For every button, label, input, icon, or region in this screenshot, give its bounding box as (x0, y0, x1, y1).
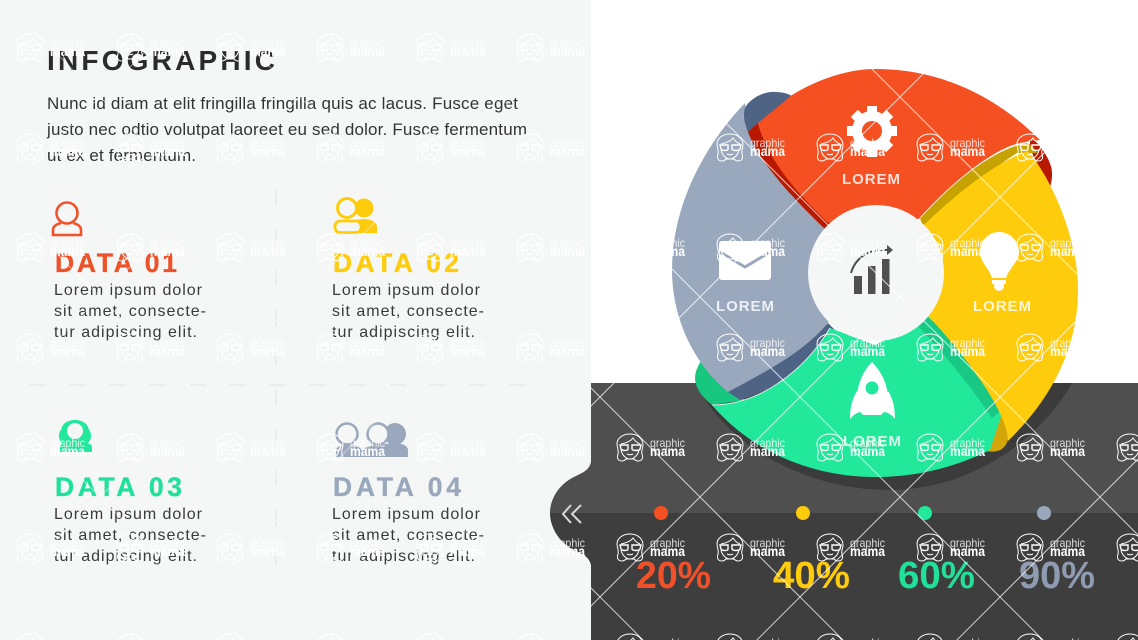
heading: data 03: DATA 03 (55, 472, 182, 502)
text: data 02 body: Lorem ipsum dolor (332, 282, 481, 299)
text: data 03 body: tur adipiscing elit. (54, 548, 197, 565)
icon: group of people (336, 423, 408, 457)
heading: data 04: DATA 04 (333, 472, 461, 502)
icon: double chevron (563, 505, 581, 523)
yellow edge highlight (920, 143, 1025, 218)
legend item: 60% (898, 506, 975, 597)
intro paragraph: justo nec odtio volutpat laoreet eu sed dolor. Fusce fermentum (46, 120, 527, 139)
intro paragraph (46, 94, 527, 165)
text: data 04 body: sit amet, consecte- (332, 527, 484, 544)
text: data 01 body: tur adipiscing elit. (54, 324, 197, 341)
intro paragraph: ut ex et fermentum. (47, 146, 196, 165)
text: data 04 body: Lorem ipsum dolor (332, 506, 481, 523)
text: data 02 body (332, 282, 484, 341)
red shadow strip (748, 123, 832, 229)
legend item: 90% (1019, 506, 1095, 597)
text: data 01 body (54, 282, 206, 341)
label: yellow lorem: LOREM (973, 298, 1031, 315)
label: blue lorem: LOREM (716, 298, 774, 315)
text: data 04 body: tur adipiscing elit. (332, 548, 475, 565)
icon: gear (847, 106, 897, 157)
panel: dark base with tab (550, 383, 1138, 640)
legend item: 60%: 60% (898, 555, 975, 597)
legend item: 20% (636, 506, 711, 597)
icon: envelope (719, 241, 771, 280)
panel: data 04 (332, 423, 484, 565)
heading: data 01: DATA 01 (55, 248, 177, 278)
green back lobe (695, 355, 745, 405)
green shadow strip (918, 316, 1004, 418)
panel: left light background (0, 0, 591, 640)
text: data 01 body: sit amet, consecte- (54, 303, 206, 320)
icon: growth chart (851, 245, 893, 294)
legend item: 40%: 40% (773, 555, 850, 597)
intro paragraph: Nunc id diam at elit fringilla fringilla quis ac lacus. Fusce eget (47, 94, 518, 113)
text: data 03 body: Lorem ipsum dolor (54, 506, 203, 523)
title: INFOGRAPHIC (47, 45, 275, 76)
text: data 03 body: sit amet, consecte- (54, 527, 206, 544)
heading: data 02: DATA 02 (333, 248, 459, 278)
label: green lorem: LOREM (843, 433, 901, 450)
chart: pinwheel (672, 69, 1078, 477)
text: data 04 body (332, 506, 484, 565)
legend item: 20%: 20% (636, 555, 711, 597)
hub circle (808, 205, 944, 341)
icon: person outline (53, 202, 81, 235)
text: data 03 body (54, 506, 206, 565)
legend: dots and percentages (636, 506, 1095, 597)
text: data 02 body: sit amet, consecte- (332, 303, 484, 320)
panel: data 01 (53, 202, 206, 341)
green edge highlight (712, 328, 830, 405)
blue back lobe (744, 92, 793, 132)
icon: rocket (850, 362, 895, 419)
icon: light bulb (980, 232, 1019, 291)
blue shadow strip (728, 323, 835, 400)
label: red lorem: LOREM (842, 171, 900, 188)
yellow shadow strip (920, 143, 1037, 235)
segment: blue (672, 103, 850, 392)
panel: data 02 (332, 198, 484, 341)
red back lobe (1030, 135, 1052, 187)
icon: two people yellow (335, 198, 377, 233)
segment: green (712, 316, 1003, 477)
text: data 02 body: tur adipiscing elit. (332, 324, 475, 341)
text: data 01 body: Lorem ipsum dolor (54, 282, 203, 299)
segment: red (758, 69, 1040, 240)
segment: yellow (880, 151, 1078, 441)
panel: data 03 (54, 420, 206, 565)
legend item: 40% (773, 506, 850, 597)
shadow under wheel (695, 383, 1072, 490)
icon: person solid green (59, 420, 92, 452)
legend item: 90%: 90% (1019, 555, 1095, 597)
gold back lobe (978, 405, 1009, 452)
